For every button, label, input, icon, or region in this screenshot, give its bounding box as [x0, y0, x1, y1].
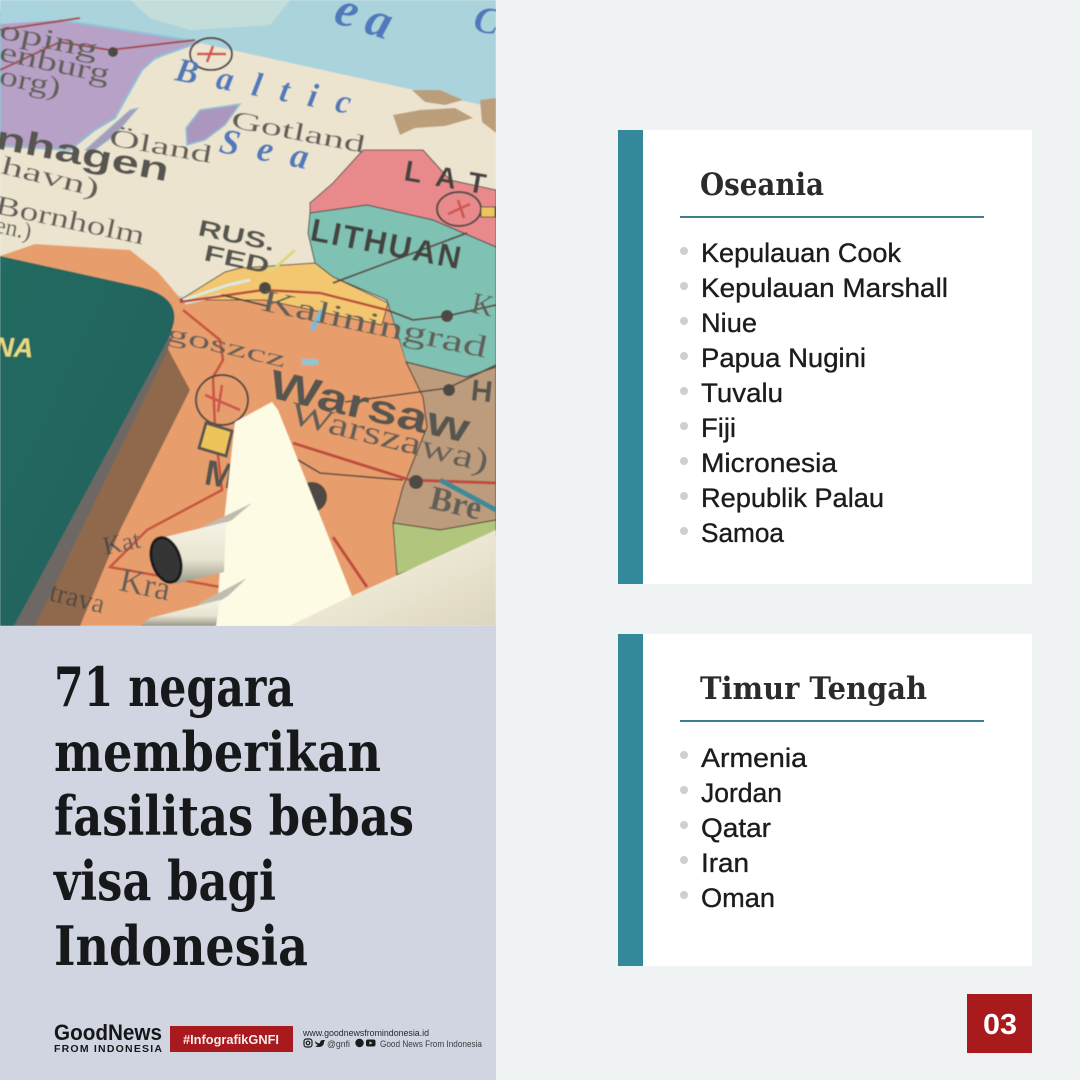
panel: Oseania [618, 130, 1032, 584]
map: labels: M [202, 452, 238, 497]
page number badge: 03 [983, 1009, 1017, 1041]
map: labels: goszcz [164, 321, 288, 373]
list: Timur Tengah countries: Oman [701, 883, 775, 913]
icon: instagram [304, 1039, 312, 1047]
map: labels: Kat [100, 525, 144, 561]
list: Timur Tengah countries: Qatar [701, 813, 771, 843]
airplane wing [216, 402, 352, 626]
map: labels: Warszawa) [286, 396, 493, 480]
footer: hashtag badge: #InfografikGNFI [183, 1032, 279, 1047]
map: labels: LITHUAN [308, 212, 466, 276]
map: labels: LAT [402, 155, 502, 204]
map: Poland [0, 244, 427, 626]
map: sea [45, 0, 496, 321]
list: Oseania countries: Niue [701, 308, 757, 338]
list: Oseania countries: Fiji [701, 413, 736, 443]
title: 71 negara [54, 655, 294, 719]
footer: website and social handles [302, 1028, 482, 1049]
heading: Oseania: Oseania [700, 167, 824, 203]
footer: GoodNews logo: GoodNews [54, 1020, 162, 1045]
map: Lithuania [308, 205, 496, 377]
list: Timur Tengah countries: Armenia [701, 743, 808, 773]
map: labels: havn) [0, 151, 103, 203]
airplane engine lower [140, 578, 247, 626]
panel accent bar [618, 130, 643, 584]
list: Oseania countries: Papua Nugini [701, 343, 866, 373]
map: city dots [108, 47, 455, 512]
map: roads, rivers and borders [0, 18, 496, 587]
footer: hashtag badge [170, 1026, 293, 1052]
list: Oseania countries: Micronesia [701, 448, 838, 478]
map: labels: trava [46, 577, 109, 620]
map: labels: Sea [216, 121, 330, 180]
footer: GoodNews logo [54, 1020, 162, 1055]
airplane engine upper [146, 503, 252, 586]
map: labels: H [469, 374, 494, 409]
map: labels [0, 0, 504, 620]
map: labels: Gotland [229, 106, 368, 159]
photo: passport and airplane on a map [0, 0, 504, 626]
passport shadow on map [33, 347, 190, 626]
map: airport symbols [190, 38, 481, 425]
list: Timur Tengah countries: Jordan [701, 778, 782, 808]
map: Latvia [310, 150, 496, 247]
map: labels: Kaliningrad [259, 283, 492, 365]
map: purple Sweden [0, 12, 200, 150]
title: visa bagi [53, 849, 276, 913]
heading: Timur Tengah: Timur Tengah [700, 671, 927, 707]
list: Oseania countries: Kepulauan Cook [701, 238, 901, 268]
passport cover [0, 256, 174, 626]
list: Timur Tengah countries: Iran [701, 848, 749, 878]
panel accent bar [618, 634, 643, 966]
map: labels: RUS. [196, 214, 278, 256]
title panel [0, 626, 496, 1080]
title: memberikan [54, 720, 381, 784]
panel body [643, 634, 1032, 966]
map: labels: Bre [426, 480, 485, 528]
icon: facebook [355, 1039, 364, 1047]
list: Oseania countries [680, 238, 948, 548]
footer: website and social handles: www.goodnewsfromindonesia.id [302, 1028, 429, 1038]
list: Oseania countries: Republik Palau [701, 483, 884, 513]
list: Oseania countries: Kepulauan Marshall [701, 273, 948, 303]
map: labels: Baltic [171, 51, 373, 125]
map: labels: K [469, 287, 497, 323]
list: Oseania countries: Tuvalu [701, 378, 783, 408]
page number badge [967, 994, 1032, 1053]
panel body [643, 130, 1032, 584]
map: Warsaw yellow capital marker [199, 423, 232, 456]
map: labels: FED [202, 239, 272, 279]
airplane fuselage [290, 530, 496, 626]
map: small brown islands [393, 90, 496, 135]
title: Indonesia [54, 914, 308, 978]
footer: GoodNews logo: FROM INDONESIA [54, 1043, 162, 1055]
map: cream land and sea area [0, 42, 496, 300]
map: Ukraine [393, 520, 496, 575]
map: labels: Kra [116, 562, 174, 608]
map: Gotland island [186, 104, 240, 145]
map: Kaliningrad [180, 263, 388, 325]
footer: website and social handles: @gnfi [327, 1039, 350, 1049]
passport page edge [14, 322, 172, 626]
list: Oseania countries: Samoa [701, 518, 785, 548]
footer: website and social handles: Good News From Indonesia [380, 1039, 482, 1049]
title: fasilitas bebas [54, 784, 414, 848]
map: Belarus [393, 362, 496, 530]
list: Timur Tengah countries [680, 743, 808, 913]
map: labels: Warsaw [265, 361, 474, 452]
icon: twitter [315, 1040, 325, 1047]
icon: youtube [366, 1040, 376, 1046]
map: labels: Öland [107, 124, 215, 169]
title [53, 655, 414, 978]
panel: Timur Tengah [618, 634, 1032, 966]
